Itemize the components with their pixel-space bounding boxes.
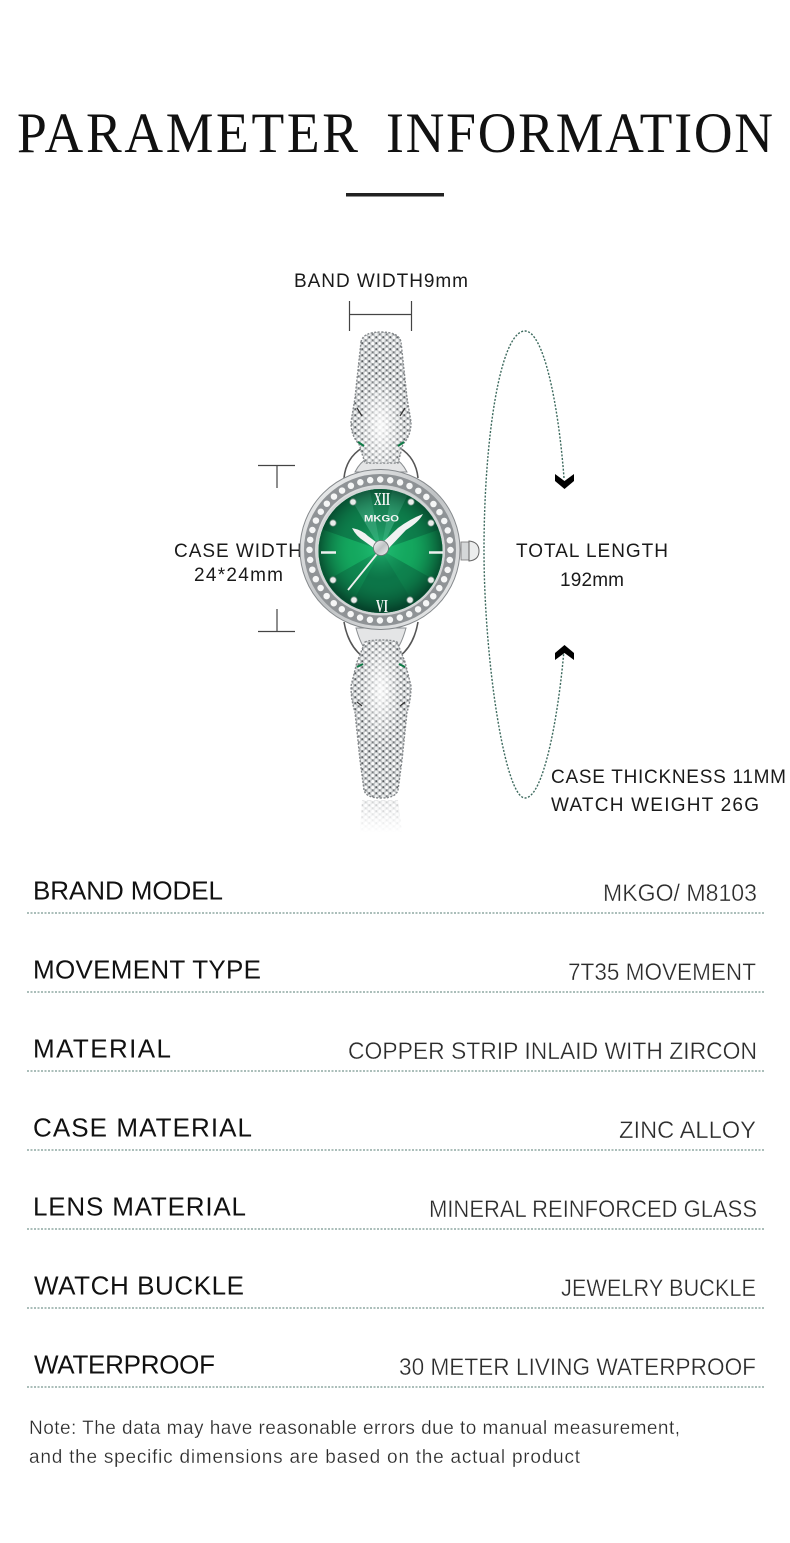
spec row: material [27, 1034, 765, 1071]
lugs [344, 448, 418, 656]
title: INFORMATION [386, 102, 773, 164]
spec row: lens material: LENS MATERIAL [33, 1192, 246, 1222]
spec row: case material [27, 1112, 765, 1150]
spec row: brand model: BRAND MODEL [33, 876, 223, 906]
watch illustration [300, 332, 479, 833]
band: lower [351, 640, 411, 798]
note: Note: The data may have reasonable errors due to manual measurement, [29, 1418, 680, 1439]
spec row: waterproof: 30 METER LIVING WATERPROOF [399, 1354, 756, 1381]
band width label: BAND WIDTH9mm [294, 271, 468, 292]
title [17, 102, 773, 164]
case width bracket [258, 466, 295, 632]
inner lugs [355, 458, 407, 656]
dial [318, 489, 442, 613]
band width bracket [350, 301, 412, 331]
dial stones [330, 499, 434, 603]
total length label [516, 541, 668, 591]
brand logo: MKGO [364, 514, 399, 524]
total length label: 192mm [560, 570, 624, 591]
spec row: watch buckle: JEWELRY BUCKLE [561, 1275, 756, 1302]
case width label: 24*24mm [194, 565, 283, 586]
spec row: material: COPPER STRIP INLAID WITH ZIRCON [348, 1038, 757, 1065]
crown [461, 541, 479, 561]
thickness and weight label: CASE THICKNESS 11MM [551, 767, 786, 788]
case width label: CASE WIDTH [174, 541, 302, 562]
numeral VI: VI [376, 596, 388, 616]
spec row: material: MATERIAL [33, 1034, 171, 1064]
spec row: lens material: MINERAL REINFORCED GLASS [429, 1196, 757, 1223]
spec row: brand model [27, 876, 765, 913]
numeral XII: XII [374, 489, 390, 509]
arrow: down [555, 474, 574, 489]
title: PARAMETER [17, 102, 358, 164]
spec row: watch buckle [27, 1270, 765, 1308]
spec row: watch buckle: WATCH BUCKLE [34, 1270, 244, 1300]
band: reflection [355, 799, 407, 833]
thickness and weight label: WATCH WEIGHT 26G [551, 795, 759, 816]
total length dashed curve [484, 331, 564, 798]
title underline [346, 193, 444, 196]
spec row: case material: CASE MATERIAL [33, 1112, 252, 1142]
note [29, 1418, 680, 1468]
spec row: movement type [27, 954, 765, 992]
spec row: movement type: MOVEMENT TYPE [33, 954, 261, 984]
total length label: TOTAL LENGTH [516, 541, 668, 562]
watch hands [348, 514, 423, 590]
hour markers [321, 551, 443, 554]
case width label [174, 541, 302, 586]
spec row: lens material [27, 1192, 765, 1229]
spec row: brand model: MKGO/ M8103 [603, 880, 757, 907]
spec row: waterproof [27, 1350, 765, 1387]
bezel [300, 470, 460, 630]
band: upper [351, 332, 411, 463]
arrow: up [555, 645, 574, 660]
thickness and weight label [551, 767, 786, 816]
spec row: waterproof: WATERPROOF [34, 1350, 215, 1380]
spec row: case material: ZINC ALLOY [619, 1117, 756, 1144]
spec row: movement type: 7T35 MOVEMENT [568, 959, 756, 986]
note: and the specific dimensions are based on the actual product [29, 1447, 581, 1468]
